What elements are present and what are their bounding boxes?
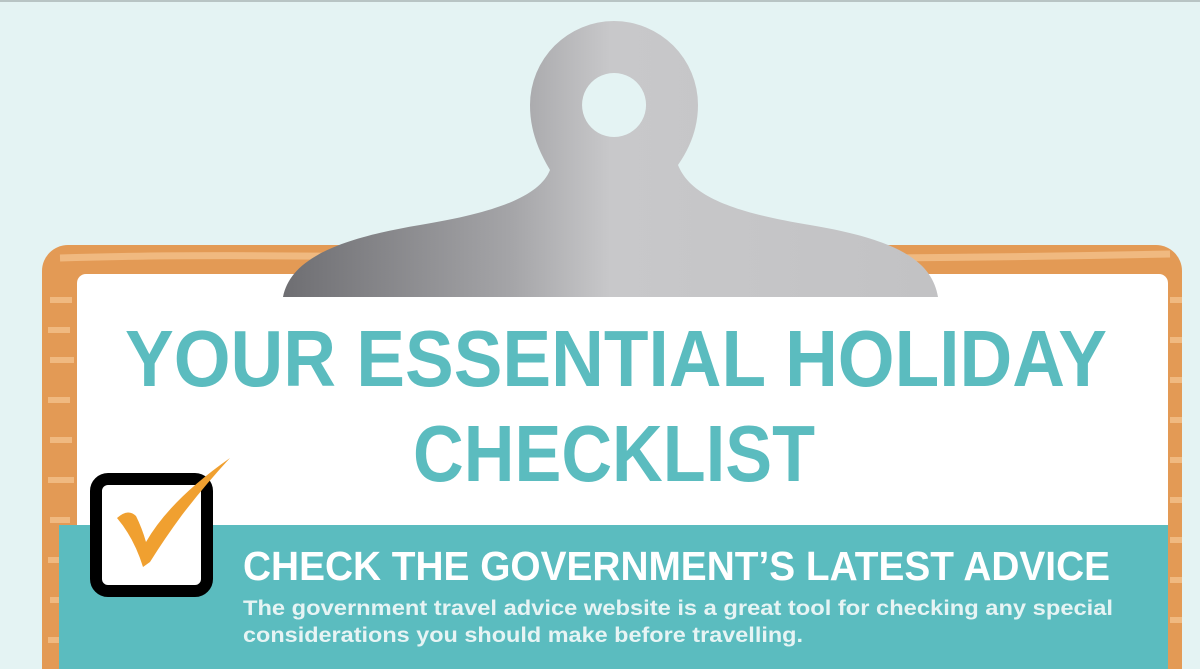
title: YOUR ESSENTIAL HOLIDAY bbox=[125, 314, 1107, 403]
title: CHECKLIST bbox=[413, 409, 815, 498]
title bbox=[125, 314, 1107, 498]
body text: The government travel advice website is a great tool for checking any special bbox=[243, 597, 1113, 620]
clip bbox=[283, 21, 938, 297]
paper bbox=[77, 274, 1168, 669]
body text: considerations you should make before travelling. bbox=[243, 624, 803, 647]
heading: CHECK THE GOVERNMENT’S LATEST ADVICE bbox=[243, 543, 1110, 589]
teal section bbox=[59, 525, 1168, 669]
clipboard board bbox=[42, 245, 1182, 669]
icon: checkbox bbox=[96, 458, 230, 591]
body text bbox=[243, 597, 1113, 647]
